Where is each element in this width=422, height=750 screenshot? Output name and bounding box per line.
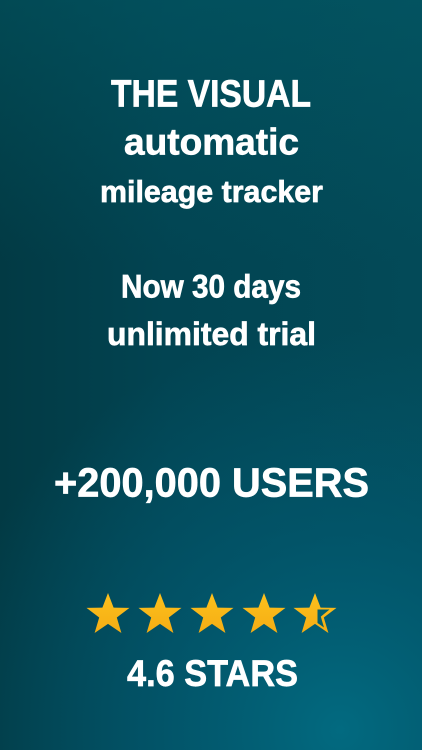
heading: the visual automatic mileage tracker: mileage tracker (100, 174, 323, 209)
text block: trial offer: unlimited trial (107, 316, 316, 352)
heading: the visual automatic mileage tracker (100, 74, 323, 209)
star rating icons (86, 593, 336, 633)
heading: the visual automatic mileage tracker: automatic (124, 122, 299, 162)
heading: the visual automatic mileage tracker: THE VISUAL (111, 74, 311, 116)
text block: trial offer: Now 30 days (121, 268, 301, 304)
rating label: 4.6 STARS (127, 653, 298, 694)
icon: partial star (294, 593, 336, 633)
text block: trial offer (107, 268, 316, 352)
text block: user count: +200,000 USERS (54, 460, 369, 506)
